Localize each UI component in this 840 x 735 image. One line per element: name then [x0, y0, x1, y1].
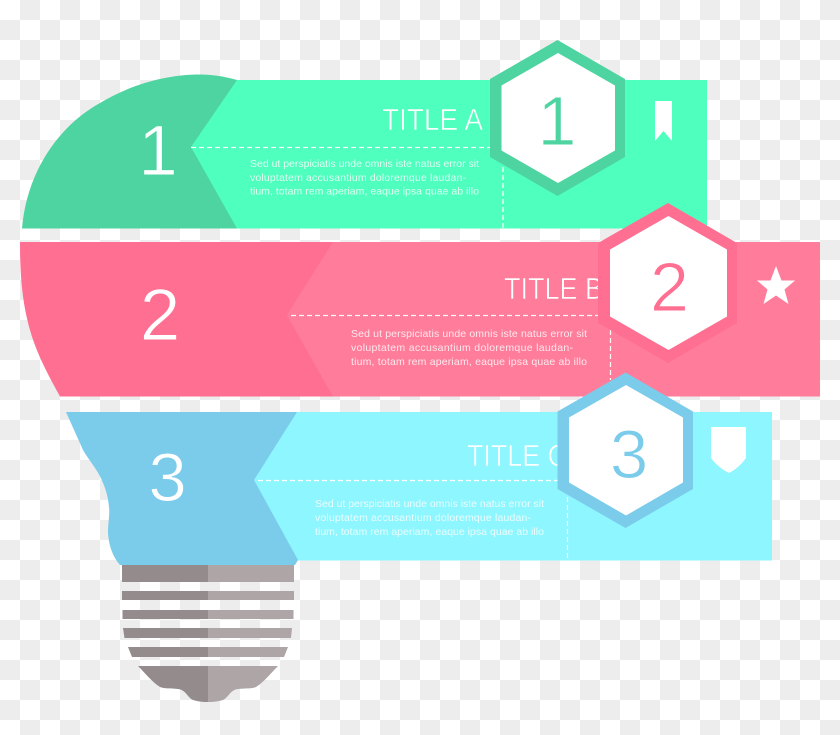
- outer ring: [490, 40, 625, 196]
- base left half: [122, 565, 208, 702]
- hexagon badge 3: [558, 372, 693, 528]
- panel: pink section 2: [20, 242, 820, 396]
- body text: Sed ut perspiciatis unde omnis iste natus error sit: [315, 498, 544, 510]
- badge number 3: 3: [610, 416, 648, 493]
- title C: TITLE C: [467, 438, 567, 473]
- number 2: 2: [140, 275, 180, 356]
- base right half: [208, 565, 294, 702]
- bulb middle segment: [20, 242, 333, 396]
- number 3: 3: [148, 439, 187, 516]
- hexagon badge 1: [490, 40, 625, 196]
- badge number 2: 2: [650, 248, 689, 326]
- dashed rules: [191, 148, 503, 228]
- icon: star: [757, 266, 795, 304]
- icon: shield: [711, 427, 746, 473]
- body text: [351, 328, 587, 368]
- inner hexagon: [502, 53, 615, 183]
- number 1: 1: [138, 112, 178, 191]
- body text: voluptatem accusantium doloremque laudan-: [315, 512, 532, 524]
- body text: voluptatem accusantium doloremque laudan-: [351, 342, 574, 354]
- panel: green section 1: [22, 74, 707, 228]
- outer ring: [558, 372, 693, 528]
- body text: tium, totam rem aperiam, eaque ipsa quae ab illo: [250, 186, 479, 198]
- body text: [315, 498, 544, 538]
- icon: bookmark: [655, 101, 672, 141]
- panel: blue section 3: [66, 412, 772, 565]
- inner hexagon: [569, 385, 683, 516]
- body text: tium, totam rem aperiam, eaque ipsa quae ab illo: [351, 356, 587, 368]
- body text: Sed ut perspiciatis unde omnis iste natus error sit: [351, 328, 587, 340]
- bulb screw base: [122, 565, 294, 702]
- body text: Sed ut perspiciatis unde omnis iste natus error sit: [250, 158, 479, 170]
- body text: tium, totam rem aperiam, eaque ipsa quae ab illo: [315, 526, 544, 538]
- body text: [250, 158, 479, 198]
- inner hexagon: [610, 216, 727, 350]
- title B: TITLE B: [504, 271, 603, 306]
- dashed rules: [291, 316, 610, 380]
- badge number 1: 1: [538, 82, 576, 160]
- title A: TITLE A: [382, 102, 483, 137]
- panel 3 band: [230, 412, 772, 560]
- outer ring: [598, 203, 737, 363]
- bulb neck segment: [66, 412, 298, 565]
- hexagon badge 2: [598, 203, 737, 363]
- panel 2 band: [270, 242, 820, 396]
- bulb top segment: [22, 74, 237, 228]
- panel 1 band: [180, 80, 707, 228]
- body text: voluptatem accusantium doloremque laudan-: [250, 172, 466, 184]
- dashed rules: [258, 480, 568, 560]
